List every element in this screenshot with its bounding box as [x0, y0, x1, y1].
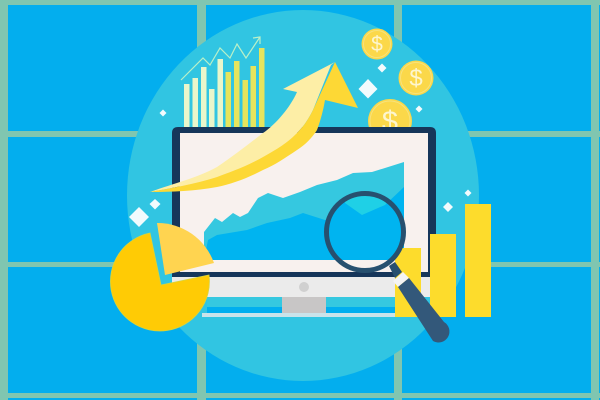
magnifying glass [325, 190, 449, 342]
monitor chin [172, 277, 436, 297]
monitor [172, 127, 436, 317]
area chart [204, 162, 404, 260]
trend line arrow [181, 37, 260, 80]
monitor screen [180, 133, 428, 272]
dollar coins [362, 28, 434, 143]
dollar coins: $ [371, 33, 383, 56]
pie chart [110, 223, 214, 331]
big rising arrow [150, 62, 358, 192]
dollar coins: $ [409, 65, 423, 92]
monitor stand and base [202, 297, 396, 317]
sparkle diamonds [129, 64, 472, 227]
monitor frame [172, 127, 436, 277]
background circle [127, 10, 479, 381]
small bar chart [184, 48, 264, 127]
dollar coins: $ [382, 106, 398, 138]
yellow bars [395, 204, 491, 317]
